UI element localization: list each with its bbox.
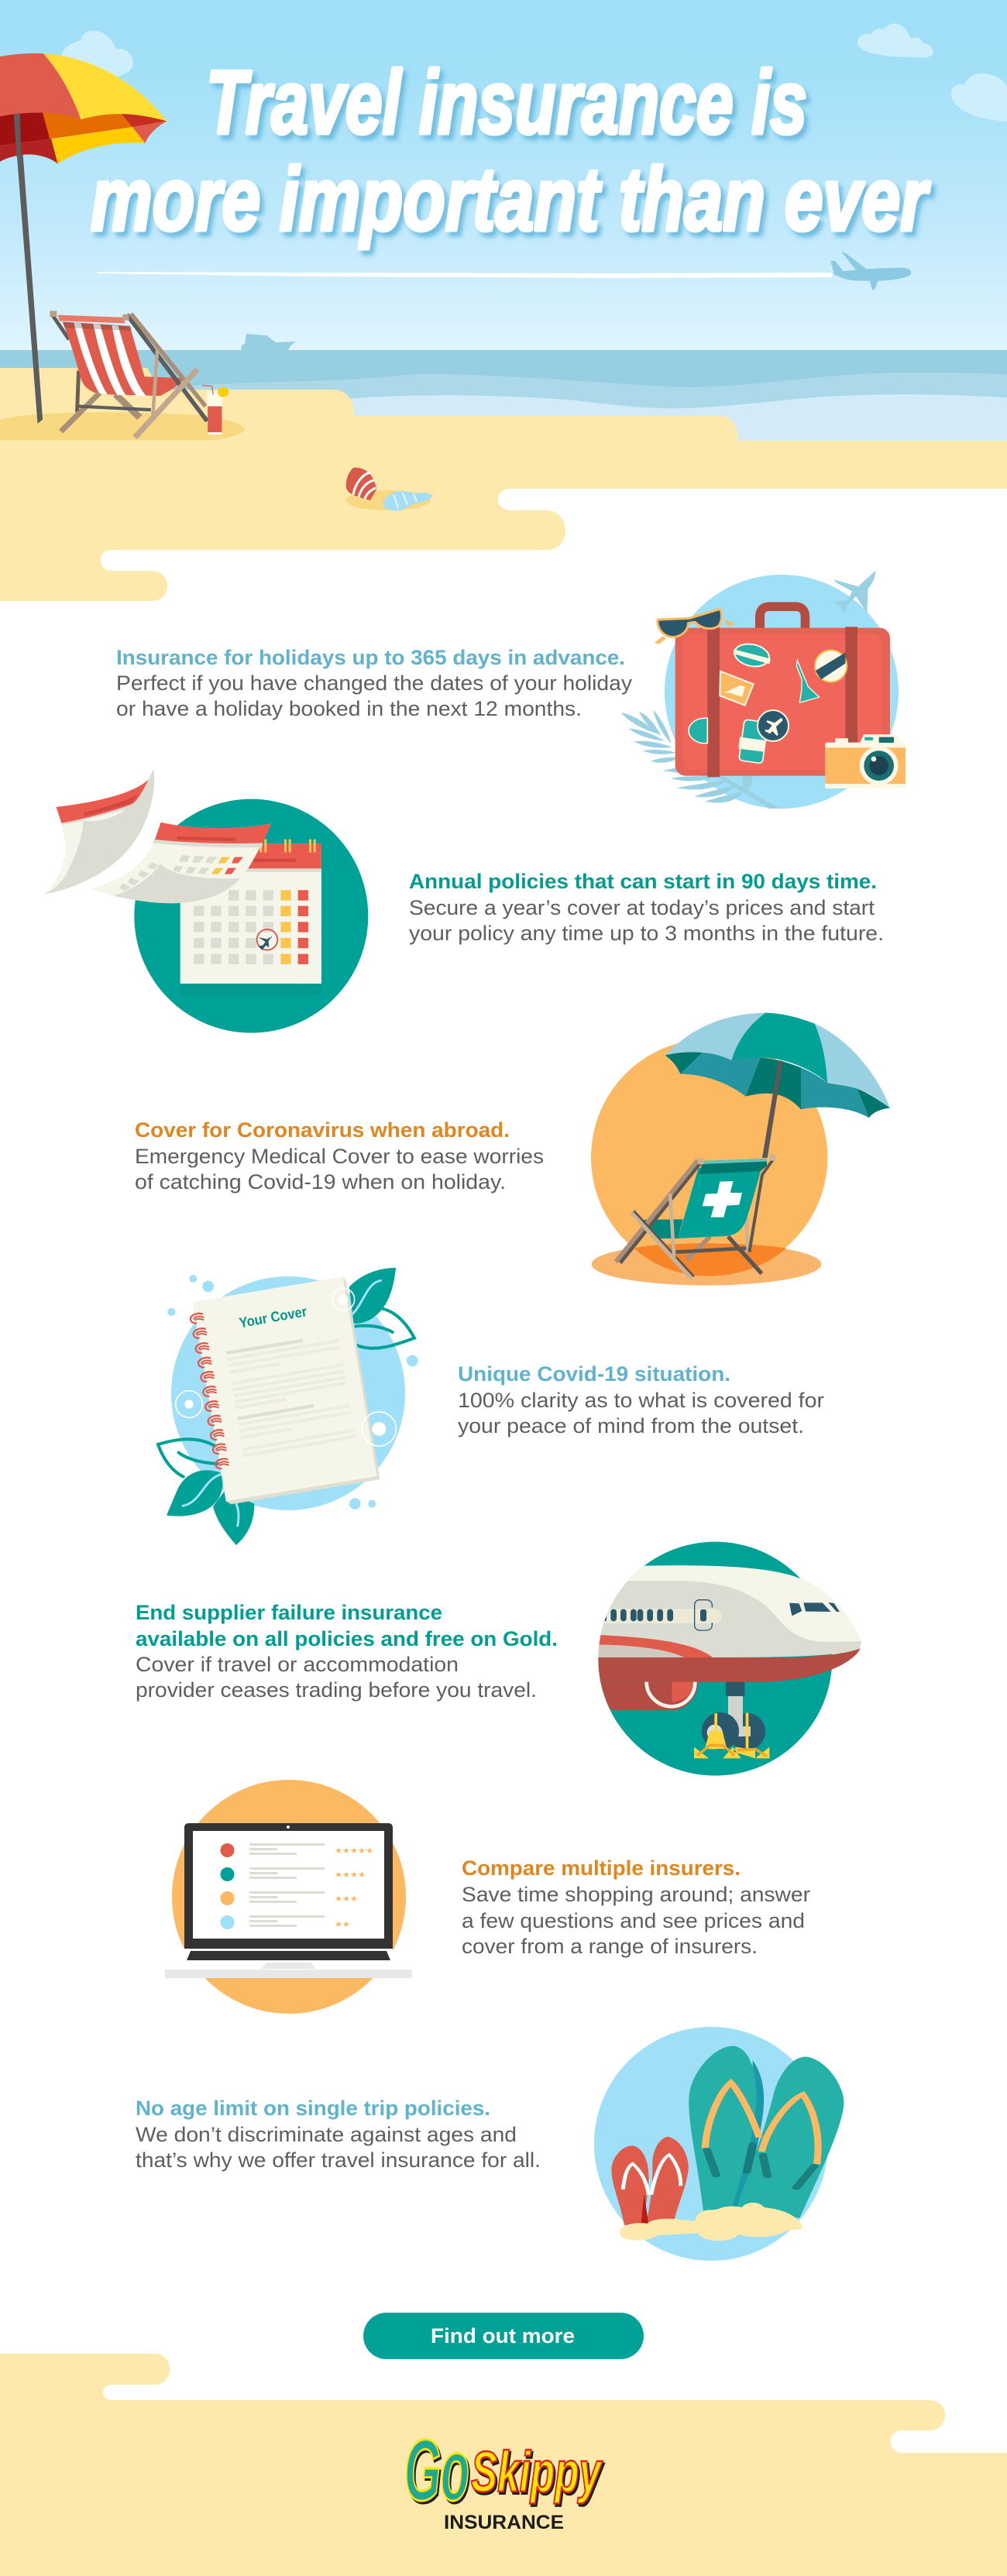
icon: suitcase — [621, 571, 906, 809]
button: find out more: Find out more — [431, 2324, 575, 2348]
text block: Emergency Medical Cover to ease worries — [135, 1145, 544, 1168]
text block: a few questions and see prices and — [462, 1909, 805, 1932]
icon: laptop comparison: ★★★★ — [335, 1870, 366, 1880]
text block: available on all policies and free on Gold. — [136, 1627, 558, 1650]
icon: laptop comparison: ★★ — [335, 1919, 350, 1929]
logo: GoSkippy Insurance — [404, 2422, 603, 2533]
text block — [458, 1362, 824, 1437]
icon: umbrella and medical chair — [591, 1013, 890, 1286]
text block: Insurance for holidays up to 365 days in advance. — [116, 646, 625, 669]
text block — [136, 2097, 541, 2172]
panel: covid-19 clarity — [158, 1268, 824, 1545]
contrail — [98, 272, 832, 278]
panel: annual policies — [44, 769, 884, 1033]
title — [91, 52, 931, 249]
text block: cover from a range of insurers. — [462, 1935, 758, 1958]
text block: End supplier failure insurance — [136, 1601, 442, 1624]
text block: Annual policies that can start in 90 days time. — [409, 870, 877, 893]
text block: Compare multiple insurers. — [462, 1856, 741, 1880]
icon: laptop comparison — [165, 1780, 412, 2014]
waves — [193, 373, 1007, 443]
text block: Unique Covid-19 situation. — [458, 1362, 730, 1386]
text block: or have a holiday booked in the next 12 months. — [116, 697, 582, 720]
text block: Cover for Coronavirus when abroad. — [135, 1118, 510, 1142]
panel: end supplier failure — [136, 1542, 861, 1776]
panel: compare insurers — [165, 1780, 810, 2014]
text block: Perfect if you have changed the dates of your holiday — [116, 671, 633, 695]
button: find out more — [363, 2313, 644, 2359]
header beach scene — [0, 0, 1007, 601]
text block: of catching Covid-19 when on holiday. — [135, 1170, 506, 1194]
footer sand — [0, 2354, 1007, 2576]
text block: 100% clarity as to what is covered for — [458, 1389, 824, 1412]
text block — [462, 1856, 810, 1958]
sea — [0, 350, 1007, 443]
text block: provider ceases trading before you travel. — [136, 1678, 537, 1702]
title: Travel insurance is — [206, 52, 807, 153]
text block: Save time shopping around; answer — [462, 1883, 810, 1906]
icon: aeroplane nose — [589, 1542, 861, 1776]
icon: laptop comparison: ★★★★★ — [335, 1846, 373, 1856]
text block: Cover if travel or accommodation — [136, 1653, 459, 1676]
sand patch — [345, 490, 431, 510]
icon: laptop comparison: ★★★ — [335, 1894, 358, 1904]
icon: red shell — [346, 468, 376, 500]
text block — [116, 646, 633, 720]
text block: No age limit on single trip policies. — [136, 2097, 490, 2120]
logo: GoSkippy Insurance: Skippy — [471, 2440, 603, 2504]
text block: your policy any time up to 3 months in the future. — [409, 922, 884, 945]
text block — [409, 870, 884, 945]
panel: holidays up to 365 days — [116, 571, 906, 809]
sand — [0, 368, 1007, 601]
beach umbrella and deck chair — [0, 53, 245, 441]
text block: that’s why we offer travel insurance for all. — [136, 2148, 541, 2172]
icon: aeroplane — [830, 252, 911, 290]
text block — [136, 1601, 558, 1702]
logo: GoSkippy Insurance: Go — [404, 2422, 469, 2519]
icon: policy notebook: Your Cover — [238, 1303, 308, 1331]
icon: calendar — [44, 769, 368, 1033]
icon: blue shell — [383, 491, 434, 510]
logo: GoSkippy Insurance: INSURANCE — [444, 2512, 564, 2533]
text block — [135, 1118, 544, 1194]
text block: your peace of mind from the outset. — [458, 1414, 804, 1437]
icon: flip-flops — [594, 2027, 844, 2261]
panel: no age limit — [136, 2027, 844, 2261]
panel: coronavirus cover — [135, 1013, 890, 1286]
ship silhouette — [241, 334, 297, 351]
clouds — [61, 24, 1007, 122]
text block: Secure a year’s cover at today’s prices and start — [409, 896, 875, 919]
icon: policy notebook — [158, 1268, 418, 1545]
sky — [0, 0, 1007, 351]
text block: We don’t discriminate against ages and — [136, 2123, 517, 2146]
